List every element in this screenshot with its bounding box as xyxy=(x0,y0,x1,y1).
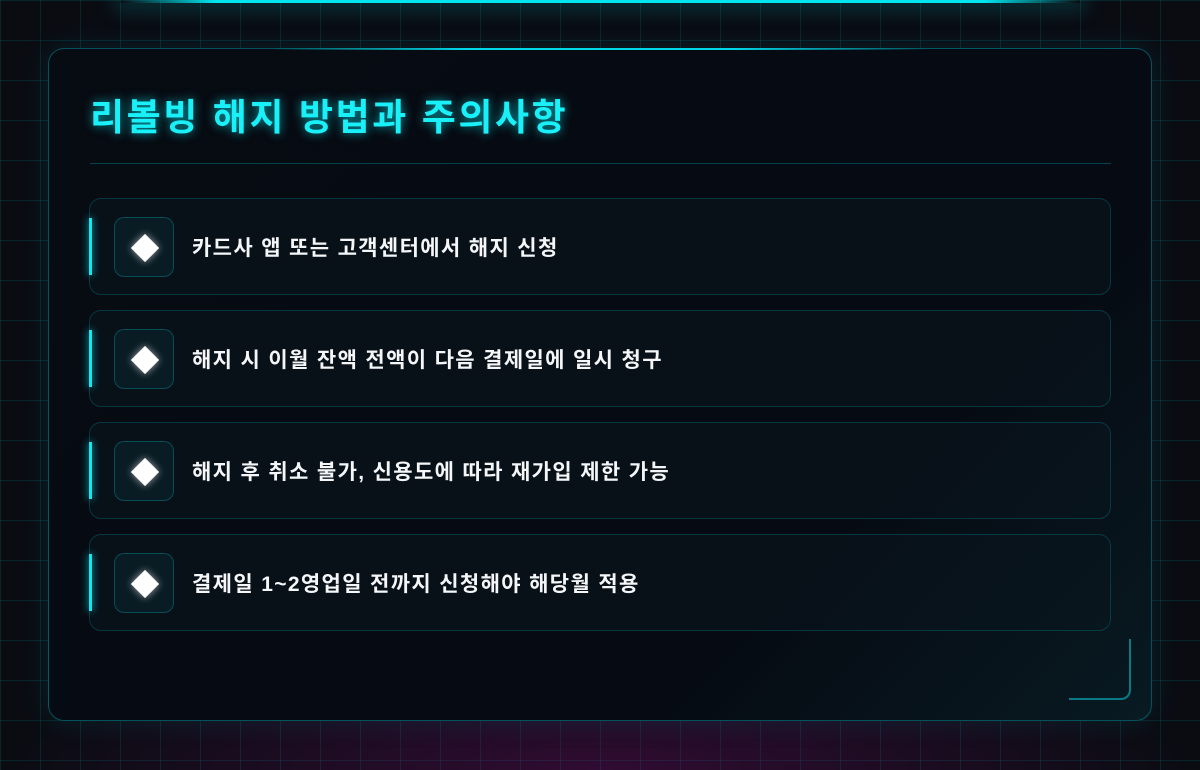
icon: diamond xyxy=(114,441,174,501)
icon: diamond xyxy=(114,217,174,277)
text: item 4: 결제일 1~2영업일 전까지 신청해야 해당월 적용 xyxy=(192,573,640,596)
text: item 1: 카드사 앱 또는 고객센터에서 해지 신청 xyxy=(192,237,559,260)
item 2 xyxy=(89,310,1111,407)
icon: diamond xyxy=(114,553,174,613)
icon: diamond xyxy=(114,329,174,389)
corner accent xyxy=(1069,639,1131,700)
item 1 xyxy=(89,198,1111,295)
item 4 xyxy=(89,534,1111,631)
text: item 3: 해지 후 취소 불가, 신용도에 따라 재가입 제한 가능 xyxy=(192,461,670,484)
item 3 xyxy=(89,422,1111,519)
title: 리볼빙 해지 방법과 주의사항 xyxy=(90,97,568,138)
text: item 2: 해지 시 이월 잔액 전액이 다음 결제일에 일시 청구 xyxy=(192,349,663,372)
